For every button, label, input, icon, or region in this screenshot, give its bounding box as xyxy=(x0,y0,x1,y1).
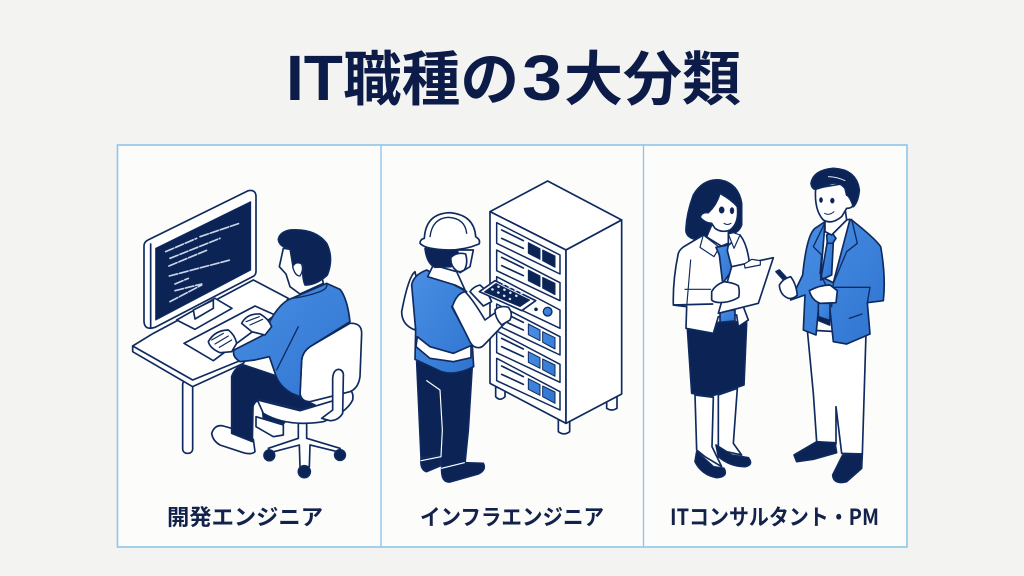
hair xyxy=(686,180,742,239)
clipboard xyxy=(718,258,773,313)
person: blue sweater xyxy=(233,283,350,397)
illustration: engineer at server rack xyxy=(402,181,622,482)
pen and left hand xyxy=(776,270,790,283)
label: ITコンサルタント・PM: ITコンサルタント・PM xyxy=(670,500,879,532)
title: IT xyxy=(286,42,343,114)
label: 開発エンジニア: 開発エンジニア xyxy=(167,500,323,532)
monitor xyxy=(144,190,256,329)
lapels and jacket seams xyxy=(813,219,870,318)
tie xyxy=(821,242,833,280)
man xyxy=(776,168,884,482)
hands xyxy=(208,314,272,353)
worker: back arm xyxy=(402,272,422,330)
person: head xyxy=(278,230,331,294)
worker: legs and boots xyxy=(417,362,484,482)
chair back xyxy=(300,323,362,402)
title: 職種の xyxy=(343,32,519,117)
eyes and mouth xyxy=(719,207,734,214)
head xyxy=(815,183,855,222)
title: 3 xyxy=(522,42,562,114)
panel: IT consultant and PM xyxy=(670,168,884,532)
pants and shoes xyxy=(794,330,866,482)
armrest xyxy=(322,369,343,421)
person: legs and shoes xyxy=(212,365,315,454)
shirt xyxy=(821,219,850,283)
hand xyxy=(495,307,511,325)
title xyxy=(286,32,741,117)
server rack xyxy=(490,181,622,434)
tie xyxy=(716,245,732,283)
label: インフラエンジニア: インフラエンジニア xyxy=(420,500,604,532)
panel: development engineer xyxy=(133,190,362,532)
chair xyxy=(256,389,353,478)
title: 大分類 xyxy=(564,32,741,117)
skirt xyxy=(687,322,747,397)
face xyxy=(700,193,738,231)
panel frame: three columns xyxy=(118,145,907,547)
jacket xyxy=(673,235,749,333)
panel: infrastructure engineer xyxy=(402,181,622,532)
keyboard xyxy=(184,306,275,361)
jacket body xyxy=(791,220,884,344)
legs and shoes xyxy=(695,388,751,478)
tablet xyxy=(479,281,536,311)
worker: blue vest xyxy=(412,270,474,373)
cuff and hand xyxy=(712,282,739,303)
right hand xyxy=(809,285,837,303)
worker: head and helmet xyxy=(420,213,480,290)
illustration: consultant and PM talking xyxy=(673,168,884,482)
woman xyxy=(673,180,773,478)
neck xyxy=(825,208,847,235)
neck xyxy=(707,225,728,247)
illustration: developer at desk xyxy=(133,190,362,478)
worker: arms xyxy=(452,285,511,348)
safety belt xyxy=(416,337,471,362)
desk xyxy=(133,280,288,453)
